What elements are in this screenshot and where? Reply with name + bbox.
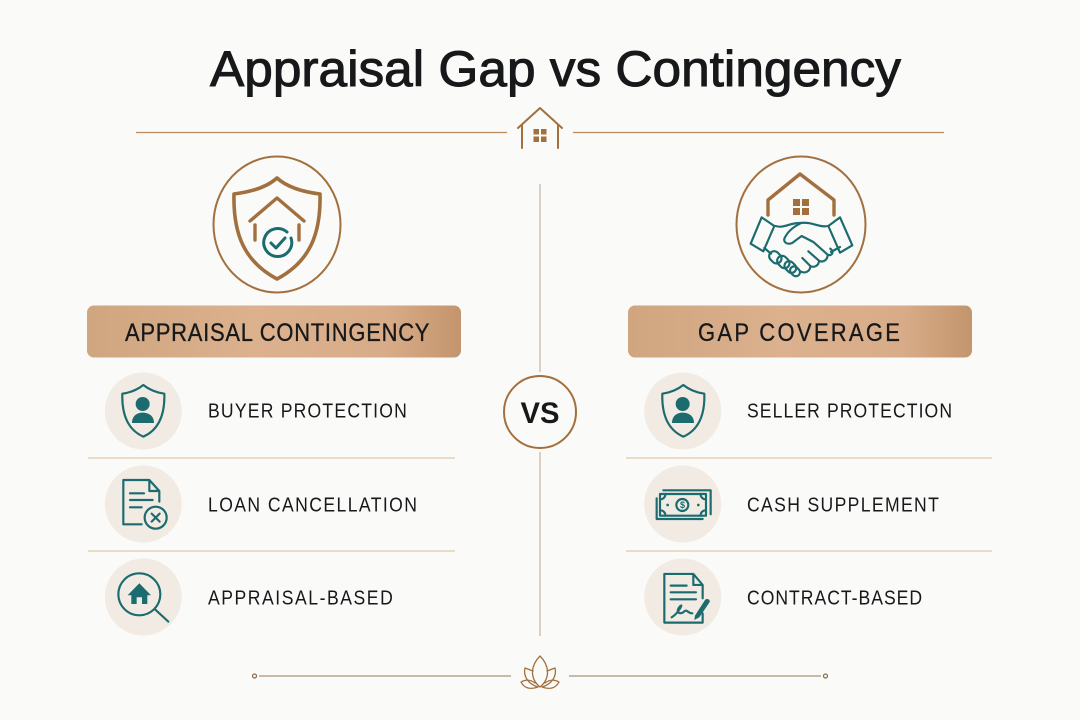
row: buyer protection: BUYER PROTECTION [208, 399, 407, 422]
heading banner: appraisal contingency: APPRAISAL CONTINGENCY [125, 319, 430, 346]
heading banner: gap coverage [628, 306, 972, 358]
row: contract-based [644, 558, 922, 636]
row: loan cancellation: LOAN CANCELLATION [208, 493, 417, 516]
header divider with house icon [136, 108, 944, 148]
footer ornament with lotus icon [252, 656, 828, 688]
icon: shield with house and check [214, 156, 340, 292]
row: appraisal-based: APPRAISAL-BASED [208, 586, 393, 609]
row: appraisal-based [105, 558, 393, 636]
panel: appraisal contingency [87, 156, 461, 636]
heading banner: gap coverage: GAP COVERAGE [698, 319, 900, 346]
row: contract-based: CONTRACT-BASED [747, 586, 922, 609]
icon: house over handshake [736, 156, 866, 292]
row: buyer protection [105, 372, 407, 450]
panel: gap coverage [626, 156, 992, 636]
row: seller protection [644, 372, 952, 450]
heading banner: appraisal contingency [87, 306, 461, 358]
row: seller protection: SELLER PROTECTION [747, 399, 952, 422]
center vs divider [504, 184, 576, 636]
row: loan cancellation [105, 466, 417, 542]
row: cash supplement: CASH SUPPLEMENT [747, 493, 939, 516]
title: Appraisal Gap vs Contingency [210, 41, 901, 97]
row: cash supplement: $ [680, 500, 685, 510]
center vs divider: VS [520, 397, 560, 430]
row: cash supplement [644, 466, 939, 542]
